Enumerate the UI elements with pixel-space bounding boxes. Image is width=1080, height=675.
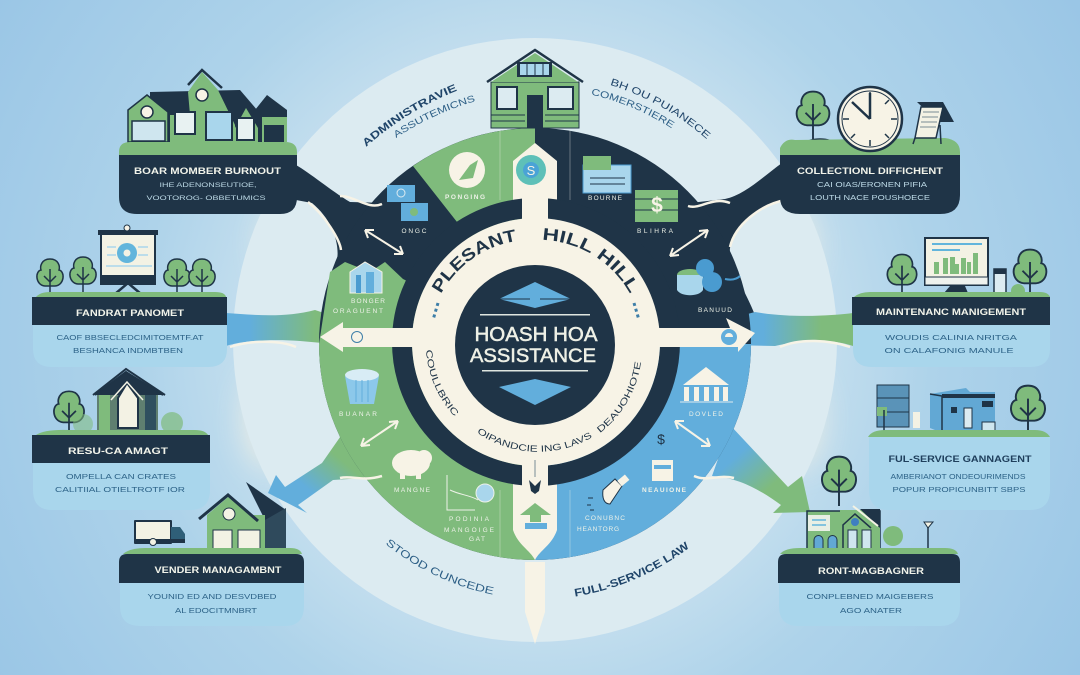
double arrow: top left [365,230,403,254]
description [810,182,930,202]
ground [780,548,958,554]
description: CONPLEBNED MAIGEBERS [806,594,934,601]
title: FUL-SERVICE GANNAGENT [888,454,1032,465]
description [884,335,1017,355]
label: bourne: BOURNE [588,195,623,202]
title: FANDRAT PANOMET [76,308,184,319]
label: bonger [333,298,385,315]
central dark disc [455,265,615,425]
card: resource [32,369,210,510]
body [869,437,1050,510]
panel [119,155,297,214]
ground [119,142,297,155]
title: MAINTENANC MANIGEMENT [876,307,1026,318]
icon: delivery truck [135,521,185,546]
icon: presentation board [98,225,158,294]
description: ON CALAFONIG MANULE [884,348,1014,355]
title rule bottom [482,370,588,372]
description: CAOF BBSECLEDCIMITOEMTF.AT [56,335,204,342]
soft highlights [243,205,822,468]
icon: coins [677,259,740,295]
title: COLLECTIONL DIFFICHENT [797,166,943,177]
icon: shelf [877,385,920,433]
card: full-service management [868,385,1050,510]
description [146,182,266,202]
description: BESHANCA INDMBTBEN [73,348,183,355]
label: conuhnc [577,515,625,533]
icon: line chart [447,475,494,510]
icon: piggy bank [392,450,432,479]
description: POPUR PROPICUNBITT SBPS [892,487,1026,494]
label: dovled: DOVLED [689,411,723,418]
wedge dividers [500,130,570,557]
icon: S badge [516,155,546,185]
description: IHE ADENONSEUTIOE, [160,182,257,189]
ground [854,292,1050,297]
icon: garage house [199,482,286,554]
double arrow: lower left [361,421,398,446]
description: OMPELLA CAN CRATES [66,474,176,481]
title: VENDER MANAGAMBNT [154,565,282,576]
icon: monitor chart [925,238,988,293]
curved label: administrative: ADMINISTRAVIE [364,84,457,147]
description: CAI OIAS/ERONEN PIFIA [817,182,927,189]
icon: clock [838,87,902,151]
icon: office building [930,388,995,432]
icon: storefront house [807,506,880,554]
label: conuhnc: HEANTORG [577,526,619,533]
header [119,554,304,583]
label: conuhnc: CONUBNC [585,515,625,522]
description [806,594,934,615]
icon: bucket [345,369,379,404]
label: ponging: PONGING [445,194,485,201]
card: fandrat pandmet [32,225,227,367]
description: LOUTH NACE POUSHOECE [810,195,930,202]
label: bonger: ORAGUENT [333,308,383,315]
top house [487,50,583,128]
cream inner ring [412,218,660,466]
connector arm: resource [268,430,365,513]
icon: money: $ [651,194,663,217]
icon: tree and plate [797,92,834,149]
icon: S badge: S [527,163,536,178]
label: podinia: GAT [469,536,485,543]
top diamond [499,282,571,308]
description [148,594,276,615]
description [55,474,185,494]
icon: document [583,156,631,193]
ground [780,138,960,155]
central title: ASSISTANCE [470,346,596,367]
label: podinia: MANGOIGE [444,527,495,534]
dashed accents [433,303,639,320]
icon: notice sign [913,102,954,144]
icon: blue cards [387,185,428,221]
curved label: full-service law: FULL-SERVICE LAW [574,541,688,596]
double arrow: top right [670,230,708,256]
quadrant: lower left green [319,262,535,560]
title rule top [480,314,590,316]
cross: vertical cream bar [513,143,557,560]
description: VOOTOROG- OBBETUMICS [146,195,266,202]
title: BOAR MOMBER BURNOUT [134,166,281,177]
tree [1011,386,1045,435]
label: podinia: PODINIA [449,516,490,523]
icon: dollar box [652,431,673,481]
card: maintenance [852,238,1050,367]
bottom diamond [499,379,571,405]
title: RESU-CA AMAGT [68,446,168,457]
central hub diagram [227,128,853,644]
body [33,463,210,510]
outer ring base [319,128,751,560]
central title [470,282,598,405]
description [890,474,1026,494]
description: WOUDIS CALINIA NRITGA [885,335,1017,342]
icon: dollar box: $ [657,431,665,447]
curved label: assutemicns: ASSUTEMICNS [395,96,474,138]
description [56,335,204,355]
label: buanar: BUANAR [339,411,377,418]
ring text: Plesant Hill Hill: OIPANDCIE ING LAVS [478,428,592,452]
ring text: Plesant Hill Hill [426,228,641,452]
label: blihra: BLIHRA [637,228,674,235]
icon: tree and house [54,369,183,435]
icon: right circle [721,329,737,345]
icon: down arrow [529,460,541,494]
label: mangne: MANGNE [394,487,431,494]
header [32,435,210,463]
horizontal cream bar [320,318,755,352]
curved label: on ou puianece: BH OU PUIANECE [610,78,711,139]
description: AL EDOCITMNBRT [175,608,258,615]
ground [36,430,208,435]
connector arm: collections [690,163,785,335]
curved label: stood cuncede: STOOD CUNCEDE [386,540,494,594]
body [779,583,960,626]
connector arm: fandrat [226,310,345,346]
ring text: Plesant Hill Hill: PLESANT [432,229,515,293]
description: YOUNID ED AND DESVDBED [148,594,276,601]
card: board member burnout [119,70,297,214]
spike below ring [525,562,545,644]
card: front manager [778,457,960,626]
pale outer disc [233,38,837,642]
description: AGO ANATER [840,608,902,615]
label: banuud: BANUUD [698,307,732,314]
header [778,554,960,583]
icon: bottle [587,474,629,510]
body [33,325,227,367]
icon: left circle [352,332,362,342]
header [852,297,1050,325]
description: CALITIIAL OTIELTROTF IOR [55,487,185,494]
icon: estate house [128,70,287,142]
icon: bird circle [449,152,485,188]
body [120,583,304,626]
trees [37,257,215,297]
icon: tower [994,269,1025,298]
label: bonger: BONGER [351,298,385,305]
panel [780,155,960,214]
card: vender management [119,482,304,626]
trees [887,250,1046,297]
quadrant: lower right blue [535,344,751,560]
vertical gaps in ring [522,198,548,486]
cream flourishes [230,196,850,479]
connector arm: board member burnout [296,165,385,270]
body [853,325,1050,367]
ring text: Plesant Hill Hill: COULLBRIC [426,350,458,416]
label: podinia [444,516,495,543]
wedge: top green [413,128,535,344]
central title: HOASH HOA [474,324,598,346]
connector arm: full-service [712,425,810,513]
icon: green up house arrow [520,503,551,529]
header [32,297,227,325]
double arrow: lower right [675,421,710,446]
title: RONT-MAGBAGNER [818,566,924,577]
icon: money [635,190,678,222]
label: neauione: NEAUIONE [642,487,687,494]
label: ongc: ONGC [402,228,427,235]
tree [822,457,856,506]
ground [868,430,1050,437]
dark ring [402,208,670,476]
ring text: Plesant Hill Hill: DEAUOHIOTE [596,362,641,432]
curved label: comerstiere: COMERSTIERE [592,89,674,128]
icon: bank [680,367,733,402]
ground [123,548,302,554]
icon: left house [350,262,382,293]
icon: bush and lamp [883,522,933,553]
card: collections [780,87,960,214]
description: AMBERIANOT ONDEOURIMENDS [890,474,1026,481]
connector arm: maintenance [725,312,853,346]
ring text: Plesant Hill Hill: HILL HILL [544,228,636,294]
ground [36,292,226,297]
